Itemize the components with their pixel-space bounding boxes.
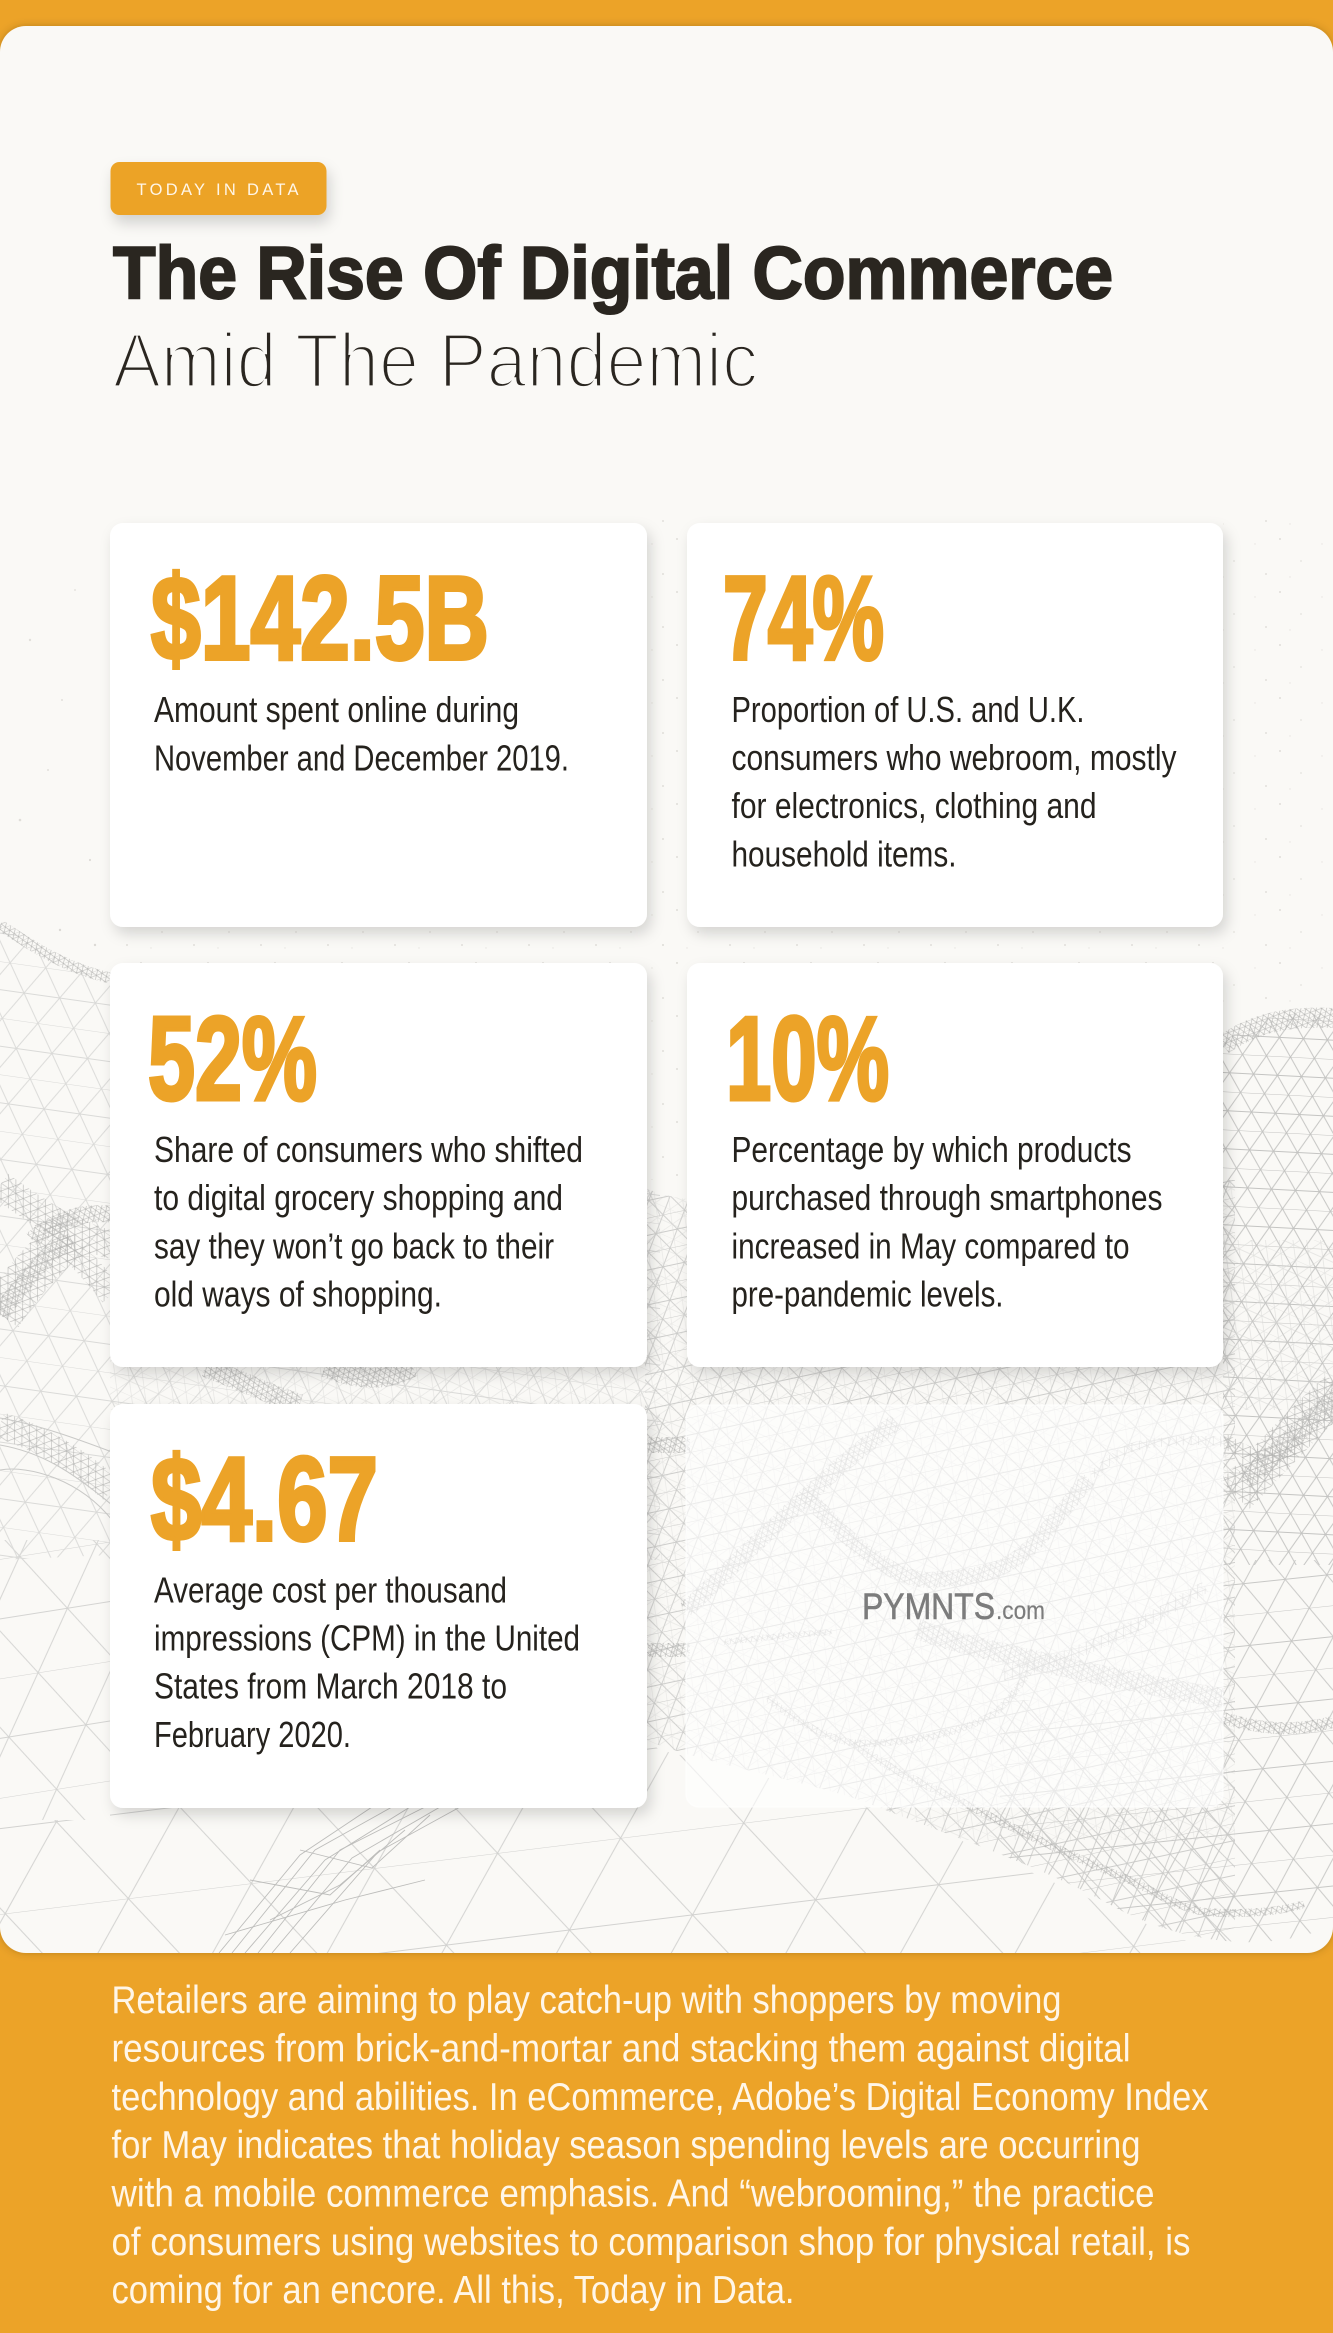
description 3: say they won’t go back to their: [154, 1226, 554, 1266]
description 2: for electronics, clothing and: [732, 785, 1096, 826]
description 2: consumers who webroom, mostly: [732, 737, 1176, 778]
panel: stat card 2: [687, 523, 1223, 927]
description 5: Average cost per thousand: [154, 1570, 507, 1610]
panel: stat card 3: [110, 963, 647, 1367]
description 1: [154, 689, 569, 778]
footer paragraph: for May indicates that holiday season spending levels are occurring: [112, 2124, 1140, 2167]
footer paragraph: [111, 1979, 1209, 2312]
badge: Today in Data: TODAY IN DATA: [136, 181, 298, 199]
description 4: Percentage by which products: [732, 1129, 1132, 1170]
background: wireframe mesh: [0, 920, 1333, 1970]
footer paragraph: with a mobile commerce emphasis. And “webrooming,” the practice: [111, 2172, 1155, 2216]
description 4: pre-pandemic levels.: [732, 1274, 1004, 1314]
description 1: November and December 2019.: [154, 738, 569, 778]
subtitle: Amid The Pandemic: [113, 318, 758, 404]
description 4: purchased through smartphones: [732, 1177, 1162, 1218]
description 5: [154, 1570, 580, 1755]
stat: $142.5B: $142.5B: [151, 552, 489, 685]
stat: 52%: 52%: [148, 992, 317, 1126]
description 5: impressions (CPM) in the United: [154, 1618, 580, 1658]
description 3: old ways of shopping.: [154, 1274, 442, 1314]
footer paragraph: resources from brick-and-mortar and stacking them against digital: [112, 2028, 1130, 2070]
panel: translucent logo card: [686, 1405, 1223, 1807]
description 2: household items.: [732, 834, 956, 874]
stat: $4.67: $4.67: [151, 1433, 378, 1566]
description 3: to digital grocery shopping and: [154, 1177, 563, 1218]
badge: Today in Data: [110, 162, 326, 215]
stat: 10%: 10%: [726, 992, 889, 1126]
description 2: [732, 689, 1176, 874]
title: [113, 232, 1113, 404]
background: particle specks: [19, 520, 1323, 1180]
footer paragraph: Retailers are aiming to play catch-up with shoppers by moving: [112, 1979, 1062, 2022]
logo: PYMNTS.com: .com: [996, 1597, 1045, 1625]
panel: stat card 5: [110, 1404, 647, 1808]
footer paragraph: of consumers using websites to comparison shop for physical retail, is: [112, 2221, 1190, 2264]
footer paragraph: technology and abilities. In eCommerce, Adobe’s Digital Economy Index: [112, 2076, 1209, 2119]
logo: PYMNTS.com: PYMNTS: [862, 1585, 995, 1627]
description 4: [732, 1129, 1162, 1314]
description 5: February 2020.: [154, 1714, 351, 1755]
description 3: [154, 1129, 583, 1314]
description 1: Amount spent online during: [154, 689, 519, 730]
description 5: States from March 2018 to: [154, 1666, 507, 1706]
description 4: increased in May compared to: [732, 1226, 1130, 1266]
description 2: Proportion of U.S. and U.K.: [732, 689, 1084, 730]
stat: 74%: 74%: [723, 552, 884, 685]
description 3: Share of consumers who shifted: [154, 1129, 583, 1170]
footer paragraph: coming for an encore. All this, Today in Data.: [112, 2269, 794, 2312]
panel: stat card 4: [687, 963, 1223, 1367]
panel: stat card 1: [110, 523, 647, 927]
title: The Rise Of Digital Commerce: [113, 232, 1113, 314]
